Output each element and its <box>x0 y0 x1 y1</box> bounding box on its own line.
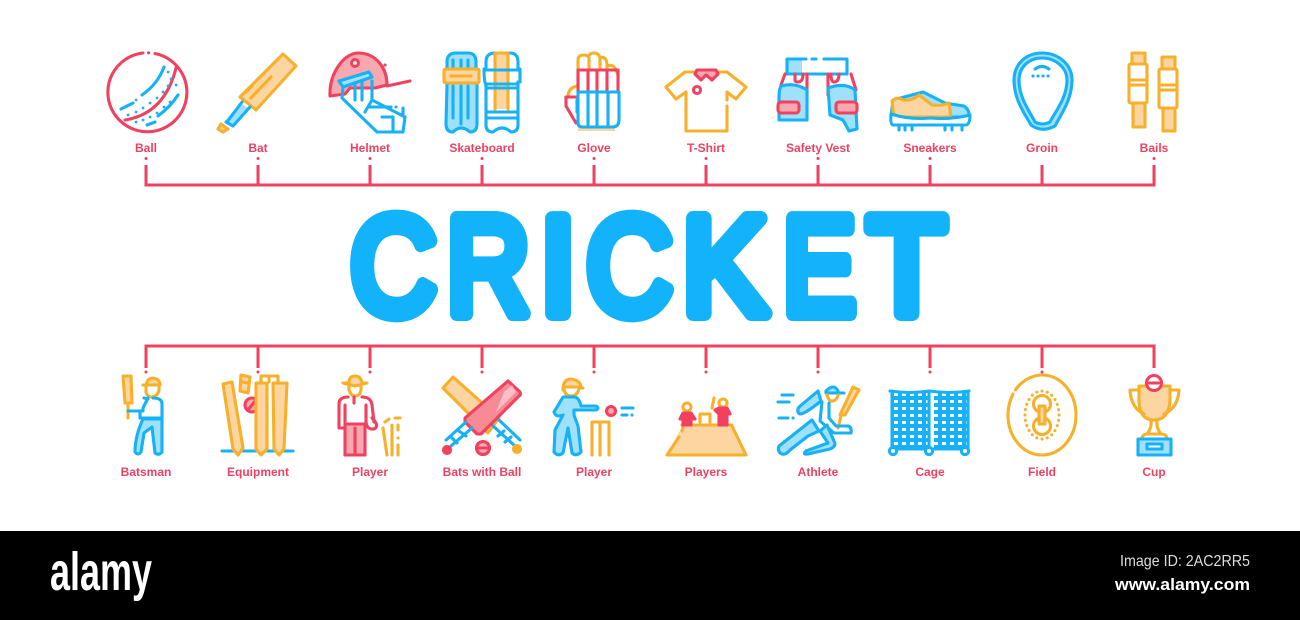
item: field <box>1008 375 1076 479</box>
label: Groin: Groin <box>1026 141 1058 155</box>
icon: running batsman <box>778 387 859 454</box>
top connector line <box>146 158 1154 185</box>
icon: batsman <box>123 376 162 454</box>
website: www.alamy.com <box>1114 575 1250 594</box>
item: players <box>667 398 746 479</box>
item: batsman <box>121 376 171 479</box>
label: Safety Vest: Safety Vest <box>786 141 850 155</box>
label: Player: Player <box>352 465 388 479</box>
item: glove <box>566 53 619 155</box>
item: player umpire <box>339 376 400 479</box>
icon: glove <box>566 53 619 131</box>
title: K <box>682 190 767 344</box>
icon: batsman with wicket <box>554 379 633 455</box>
title <box>350 189 946 344</box>
item: t-shirt <box>666 70 746 155</box>
item: groin <box>1014 53 1072 155</box>
label: Batsman: Batsman <box>121 465 171 479</box>
icon: trophy <box>1130 376 1179 455</box>
title: I <box>540 189 576 344</box>
icon: pitch with players <box>667 398 746 455</box>
label: Bat: Bat <box>248 141 268 155</box>
item: sneakers <box>891 92 970 155</box>
label: Bails: Bails <box>1140 141 1169 155</box>
item: ball <box>108 53 187 155</box>
title: T <box>867 189 946 344</box>
label: Field: Field <box>1028 465 1056 479</box>
label: Skateboard: Skateboard <box>449 141 515 155</box>
icon: helmet <box>330 53 410 132</box>
label: Equipment: Equipment <box>227 465 289 479</box>
item: cup <box>1130 376 1179 479</box>
label: Player: Player <box>576 465 612 479</box>
label: Ball: Ball <box>135 141 157 155</box>
icon: sneaker <box>891 92 970 130</box>
bottom connector line <box>146 346 1154 372</box>
icon: groin guard <box>1014 53 1072 129</box>
icon: t-shirt <box>666 70 746 131</box>
icon: broken wicket <box>222 375 293 455</box>
item: cage <box>889 391 969 479</box>
label: Sneakers: Sneakers <box>903 141 957 155</box>
icon: cricket field <box>1008 375 1076 455</box>
label: Helmet: Helmet <box>350 141 390 155</box>
icon: net cage <box>889 391 969 455</box>
label: Athlete: Athlete <box>798 465 839 479</box>
icon: ball <box>108 53 187 132</box>
label: Bats with Ball: Bats with Ball <box>443 465 521 479</box>
item: player bowler <box>554 379 633 479</box>
icon: umpire <box>339 376 400 455</box>
footer logo: alamy <box>50 542 152 602</box>
label: Glove: Glove <box>577 141 611 155</box>
footer bar <box>0 531 1300 620</box>
item: equipment <box>222 375 293 479</box>
item: helmet <box>330 53 410 155</box>
icon: leg pads <box>444 53 520 132</box>
title: C <box>586 189 672 344</box>
icon: protective shorts <box>778 59 857 131</box>
title: E <box>783 189 856 343</box>
label: Players: Players <box>685 465 728 479</box>
item: safety vest <box>778 59 857 155</box>
label: Cage: Cage <box>915 465 945 479</box>
item: bat <box>218 54 296 155</box>
item: bats with ball <box>443 377 521 479</box>
item: skateboard <box>444 53 520 155</box>
item: athlete <box>778 387 859 479</box>
title: R <box>447 189 530 343</box>
item: bails <box>1129 53 1177 155</box>
label: T-Shirt: T-Shirt <box>687 141 725 155</box>
image id: Image ID: 2AC2RR5 <box>1120 553 1250 570</box>
title: C <box>350 189 436 344</box>
icon: crossed bats with ball <box>443 377 520 454</box>
icon: bat <box>218 54 296 132</box>
label: Cup: Cup <box>1142 465 1166 479</box>
icon: bails <box>1129 53 1177 131</box>
